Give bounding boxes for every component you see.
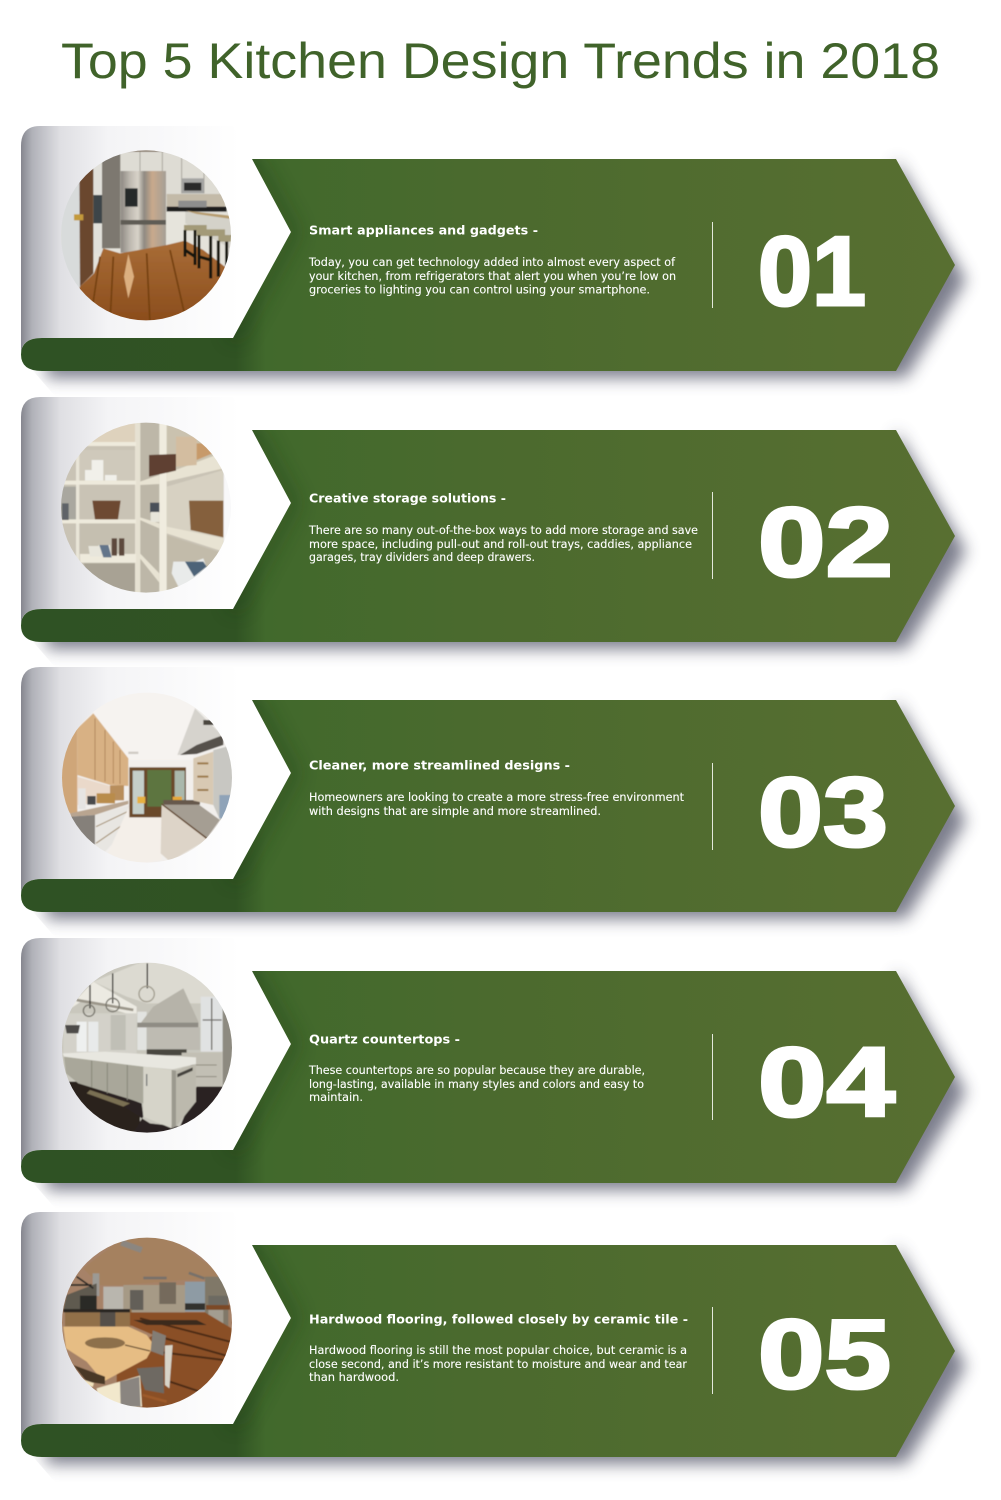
heading: Creative storage solutions - <box>309 492 506 506</box>
heading: Smart appliances and gadgets - <box>309 224 538 238</box>
body text: maintain. <box>309 1090 363 1104</box>
photo: bright wood kitchen <box>60 690 233 867</box>
body text: Homeowners are looking to create a more stress-free environment <box>309 790 684 804</box>
body text: close second, and it’s more resistant to moisture and wear and tear <box>309 1357 687 1371</box>
panel: trend 4 quartz countertops <box>21 938 966 1190</box>
photo: open plan dining and wood floor <box>60 1235 233 1412</box>
body text: your kitchen, from refrigerators that alert you when you’re low on <box>309 269 676 283</box>
heading: Cleaner, more streamlined designs - <box>309 758 570 774</box>
body text: There are so many out-of-the-box ways to add more storage and save <box>308 523 698 537</box>
body text: Today, you can get technology added into almost every aspect of <box>308 255 676 269</box>
title: Top 5 Kitchen Design Trends in 2018 <box>61 33 940 89</box>
body text <box>309 1343 687 1384</box>
photo: pantry shelves <box>61 422 224 593</box>
panel: trend 5 hardwood flooring <box>21 1212 966 1464</box>
panel: trend 3 streamlined designs <box>21 667 966 919</box>
body text: These countertops are so popular because they are durable, <box>308 1063 645 1077</box>
body text: with designs that are simple and more streamlined. <box>309 804 601 818</box>
number 01: 01 <box>758 216 866 326</box>
number 04: 04 <box>758 1027 895 1137</box>
number 03: 03 <box>758 757 888 867</box>
body text: groceries to lighting you can control using your smartphone. <box>309 282 650 296</box>
body text: garages, tray dividers and deep drawers. <box>309 550 535 564</box>
heading: Quartz countertops - <box>309 1032 460 1048</box>
photo: kitchen with steel fridge <box>60 150 233 323</box>
body text: more space, including pull-out and roll-out trays, caddies, appliance <box>309 537 692 551</box>
panel: trend 2 creative storage <box>21 397 966 649</box>
body text: Hardwood flooring is still the most popular choice, but ceramic is a <box>309 1343 687 1357</box>
heading: Hardwood flooring, followed closely by ceramic tile - <box>309 1312 688 1328</box>
body text <box>308 1063 645 1104</box>
body text: long-lasting, available in many styles and colors and easy to <box>309 1077 644 1091</box>
body text <box>308 523 698 564</box>
number 02: 02 <box>758 487 893 597</box>
body text <box>309 790 684 818</box>
body text <box>308 255 676 296</box>
number 05: 05 <box>758 1299 891 1409</box>
panel: trend 1 smart appliances <box>21 126 966 378</box>
body text: than hardwood. <box>309 1370 399 1384</box>
photo: white island kitchen <box>60 960 237 1137</box>
